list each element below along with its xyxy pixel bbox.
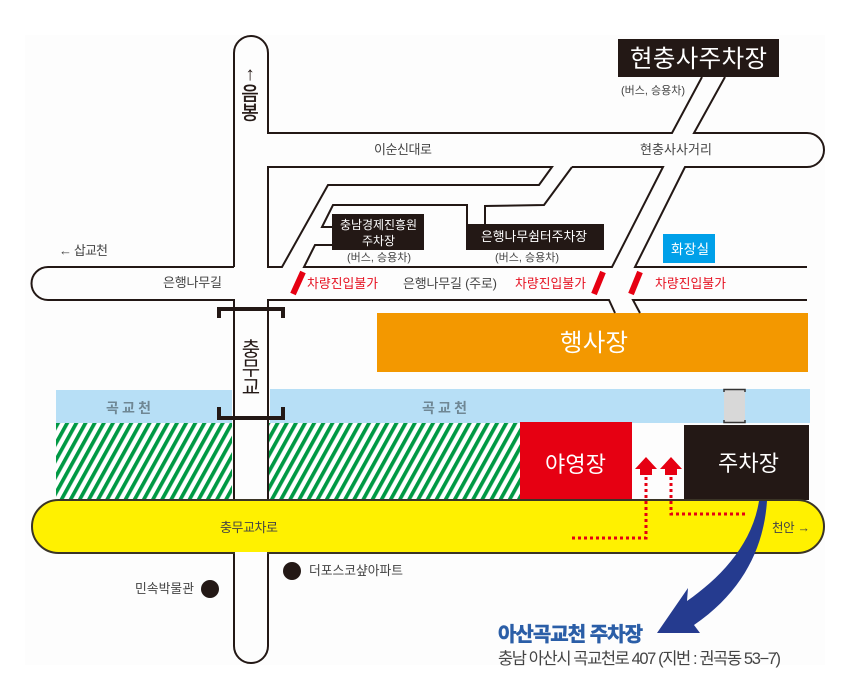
landmark: folk museum bbox=[135, 580, 219, 598]
label: Chungmugyo: 무 bbox=[242, 358, 260, 380]
small bridge bbox=[724, 389, 745, 423]
route arrow: to parking bbox=[660, 457, 745, 514]
label: Chungmugyo bbox=[242, 338, 260, 399]
address block: 충남 아산시 곡교천로 407 (지번 : 권곡동 53−7) bbox=[498, 649, 781, 668]
label: Chungmugyo: 충 bbox=[242, 338, 260, 361]
road: Chungmugyo intersection bbox=[32, 500, 824, 553]
label: Yi Sun-sin road: 이순신대로 bbox=[374, 142, 432, 157]
no entry marker 2: 차량진입불가 bbox=[515, 276, 586, 291]
label: to Sapgyocheon: ← 삽교천 bbox=[59, 243, 108, 258]
arrow: to parking address bbox=[657, 501, 767, 633]
panel: ginkgo rest area parking: (버스, 승용차) bbox=[495, 251, 559, 264]
river: Gokgyocheon west: 곡교천 bbox=[106, 400, 151, 416]
label: Eunhaengnamu road: 은행나무길 bbox=[163, 275, 222, 290]
panel: Hyeonchungsa parking: 현충사주차장 bbox=[630, 45, 767, 73]
panel: Chungnam economic agency parking: 충남경제진흥원 bbox=[340, 218, 417, 232]
panel: restroom bbox=[663, 234, 715, 263]
no entry marker 2 bbox=[515, 272, 603, 294]
address block: 아산곡교천 주차장 bbox=[498, 623, 643, 646]
panel: Hyeonchungsa parking: (버스, 승용차) bbox=[621, 84, 685, 97]
panel: parking lot: 주차장 bbox=[718, 451, 779, 476]
label: Eunhaengnamu main road: 은행나무길 (주로) bbox=[403, 276, 497, 291]
no entry marker 3 bbox=[631, 272, 726, 294]
no entry marker 1: 차량진입불가 bbox=[307, 276, 378, 291]
label: to Eumbong: 음 bbox=[241, 84, 259, 105]
panel: restroom: 화장실 bbox=[671, 242, 709, 257]
panel: campground bbox=[520, 422, 632, 500]
white gap where vertical road crosses bbox=[235, 552, 267, 555]
route arrow: to campground bbox=[572, 457, 657, 538]
river: Gokgyocheon east bbox=[270, 389, 810, 423]
label: to Eumbong: ↑ bbox=[245, 64, 255, 85]
river: Gokgyocheon west bbox=[56, 390, 232, 423]
panel: campground: 야영장 bbox=[545, 452, 606, 477]
panel: event venue: 행사장 bbox=[560, 329, 628, 357]
label: to Eumbong bbox=[241, 64, 259, 124]
green area west bbox=[56, 423, 232, 500]
panel: parking lot bbox=[684, 425, 809, 500]
landmark: folk museum: 민속박물관 bbox=[135, 581, 194, 596]
landmark: The Sharp apartment bbox=[283, 562, 403, 580]
river: Gokgyocheon east: 곡교천 bbox=[422, 400, 467, 416]
panel: Hyeonchungsa parking bbox=[618, 39, 779, 97]
no entry marker 1 bbox=[293, 272, 378, 294]
label: to Eumbong: 봉 bbox=[241, 103, 259, 124]
label: Hyeonchungsa intersection: 현충사사거리 bbox=[640, 142, 712, 157]
green area east bbox=[269, 423, 520, 500]
panel: ginkgo rest area parking bbox=[466, 224, 604, 264]
panel: ginkgo rest area parking: 은행나무쉼터주차장 bbox=[481, 229, 587, 244]
bridge bracket: Chungmugyo bbox=[219, 309, 283, 418]
landmark: The Sharp apartment: 더포스코샾아파트 bbox=[309, 563, 403, 578]
panel: Chungnam economic agency parking: (버스, 승용차) bbox=[347, 251, 411, 264]
label: Chungmugyo: 교 bbox=[242, 377, 260, 399]
panel: event venue bbox=[377, 313, 808, 372]
address block bbox=[498, 623, 781, 668]
no entry marker 3: 차량진입불가 bbox=[655, 276, 726, 291]
panel: Chungnam economic agency parking: 주차장 bbox=[362, 234, 395, 248]
road: Chungmugyo intersection: 천안 → bbox=[772, 520, 810, 535]
panel: Chungnam economic agency parking bbox=[332, 214, 424, 264]
road: Chungmugyo intersection: 충무교차로 bbox=[220, 520, 278, 535]
